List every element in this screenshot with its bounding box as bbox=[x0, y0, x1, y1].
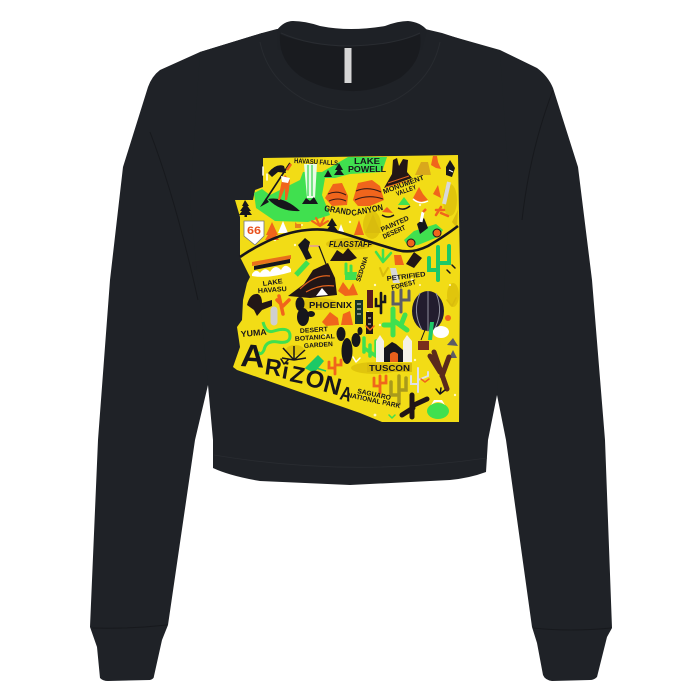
forest trees bbox=[265, 163, 381, 240]
phoenix label: PHOENIX bbox=[309, 300, 352, 310]
phoenix buildings bbox=[355, 290, 373, 334]
grand canyon label: GRAND bbox=[324, 203, 352, 217]
petrified forest label bbox=[386, 271, 426, 292]
dark heart cactus bbox=[247, 294, 272, 316]
tuscon label: TUSCON bbox=[369, 364, 410, 373]
back collar bbox=[277, 21, 427, 50]
green saguaro bbox=[429, 246, 449, 280]
figure bbox=[278, 175, 290, 200]
green canyon strip bbox=[345, 272, 357, 280]
tuscon label bbox=[367, 363, 412, 373]
decorative leaf tufts bbox=[263, 167, 456, 418]
body bbox=[190, 29, 510, 485]
white speckles bbox=[259, 204, 456, 416]
lake havasu label: LAKE bbox=[262, 278, 284, 288]
white cactus bbox=[411, 368, 428, 392]
desert botanical garden label: BOTANICAL bbox=[295, 333, 335, 343]
monument valley rocks bbox=[384, 158, 412, 188]
desert botanical garden label bbox=[295, 326, 335, 350]
olive saguaro bbox=[391, 376, 406, 404]
arizona title: A bbox=[338, 383, 354, 407]
green lake and river bbox=[254, 157, 387, 222]
arizona title: N bbox=[320, 371, 344, 401]
grand canyon rocks bbox=[325, 180, 384, 206]
orange rocks at sedona bbox=[338, 282, 358, 296]
pine tree icon bbox=[239, 200, 252, 217]
mountain bbox=[288, 263, 337, 298]
small rocks east bbox=[447, 338, 458, 358]
lake powell label: LAKE bbox=[354, 157, 381, 166]
brown cactus bbox=[430, 352, 449, 389]
northeast small icons bbox=[382, 156, 458, 228]
lake powell label: POWELL bbox=[348, 165, 386, 174]
black saguaro bbox=[376, 293, 385, 313]
agave plants bbox=[346, 250, 391, 276]
green car with driver bbox=[404, 209, 443, 247]
petrified forest label: PETRIFIED bbox=[386, 271, 426, 283]
route 66 shield: 66 bbox=[247, 225, 261, 237]
flagstaff label: FLAGSTAFF bbox=[329, 239, 373, 249]
route 66 road bbox=[240, 226, 458, 257]
green branching cactus bbox=[384, 309, 407, 335]
painted desert label: PAINTED bbox=[380, 215, 410, 234]
arizona title: i bbox=[280, 357, 291, 384]
Arizona map print bbox=[233, 151, 460, 422]
saguaro national park label: NATIONAL PARK bbox=[347, 392, 401, 410]
left sleeve bbox=[90, 33, 262, 681]
green snake bbox=[258, 322, 290, 354]
saguaro national park label: SAGUARO bbox=[357, 388, 391, 402]
hiker on mountain bbox=[296, 238, 326, 275]
arizona title: Z bbox=[288, 360, 307, 389]
hot air balloon bbox=[412, 291, 451, 350]
green bush bbox=[364, 338, 376, 356]
sweatshirt bbox=[90, 21, 612, 681]
orange rocks bbox=[322, 311, 353, 326]
yuma label: YUMA bbox=[240, 327, 267, 339]
waterfall bbox=[302, 164, 318, 204]
green barrel cactus small bbox=[306, 356, 326, 372]
arizona title bbox=[240, 337, 354, 407]
cuff seams bbox=[92, 625, 611, 630]
green barrel cactus bbox=[427, 400, 449, 419]
grand canyon label bbox=[324, 202, 384, 218]
desert botanical garden label: GARDEN bbox=[304, 341, 333, 350]
havasu falls label: HAVASU FALLS bbox=[294, 158, 338, 167]
collar ribbing bbox=[260, 42, 440, 110]
painted desert label: DESERT bbox=[382, 224, 407, 241]
hem seam bbox=[214, 455, 487, 467]
agave black bbox=[282, 346, 306, 360]
gray cactus bbox=[393, 290, 409, 312]
ochre texture patches bbox=[286, 184, 459, 374]
orange saguaro bbox=[374, 376, 386, 393]
prickly pear black cactus bbox=[336, 327, 362, 364]
arizona title: R bbox=[263, 353, 284, 381]
monument valley label: MONUMENT bbox=[382, 174, 426, 196]
orange cactus center bbox=[329, 358, 341, 374]
sedona rocks bbox=[330, 248, 357, 261]
tucson mission bbox=[376, 335, 412, 362]
black prickly pear bbox=[296, 297, 315, 326]
route 66 shield bbox=[244, 221, 264, 245]
petrified forest label: FOREST bbox=[391, 279, 417, 292]
armhole seams bbox=[150, 90, 553, 300]
map base bbox=[233, 155, 460, 422]
sedona label: SEDONA bbox=[355, 255, 370, 283]
dark cactus bbox=[402, 395, 427, 417]
lake havasu label bbox=[258, 278, 287, 295]
neck label tag bbox=[344, 48, 352, 83]
right sleeve bbox=[440, 33, 612, 681]
desert botanical garden label: DESERT bbox=[300, 326, 328, 335]
neck opening bbox=[280, 34, 421, 91]
neck tape bbox=[281, 33, 420, 46]
arizona title: O bbox=[303, 365, 327, 395]
lake havasu bridge bbox=[252, 255, 291, 277]
petrified forest rocks bbox=[390, 252, 422, 283]
lake havasu label: HAVASU bbox=[258, 286, 287, 295]
paddle boarder bbox=[260, 163, 300, 211]
grand canyon label: CANYON bbox=[350, 202, 384, 218]
orange cactus and gray cactus bbox=[274, 296, 289, 322]
monument valley label: VALLEY bbox=[395, 184, 418, 198]
arizona title: A bbox=[240, 337, 266, 375]
paddle bbox=[265, 163, 290, 201]
paddle board bbox=[268, 198, 300, 211]
